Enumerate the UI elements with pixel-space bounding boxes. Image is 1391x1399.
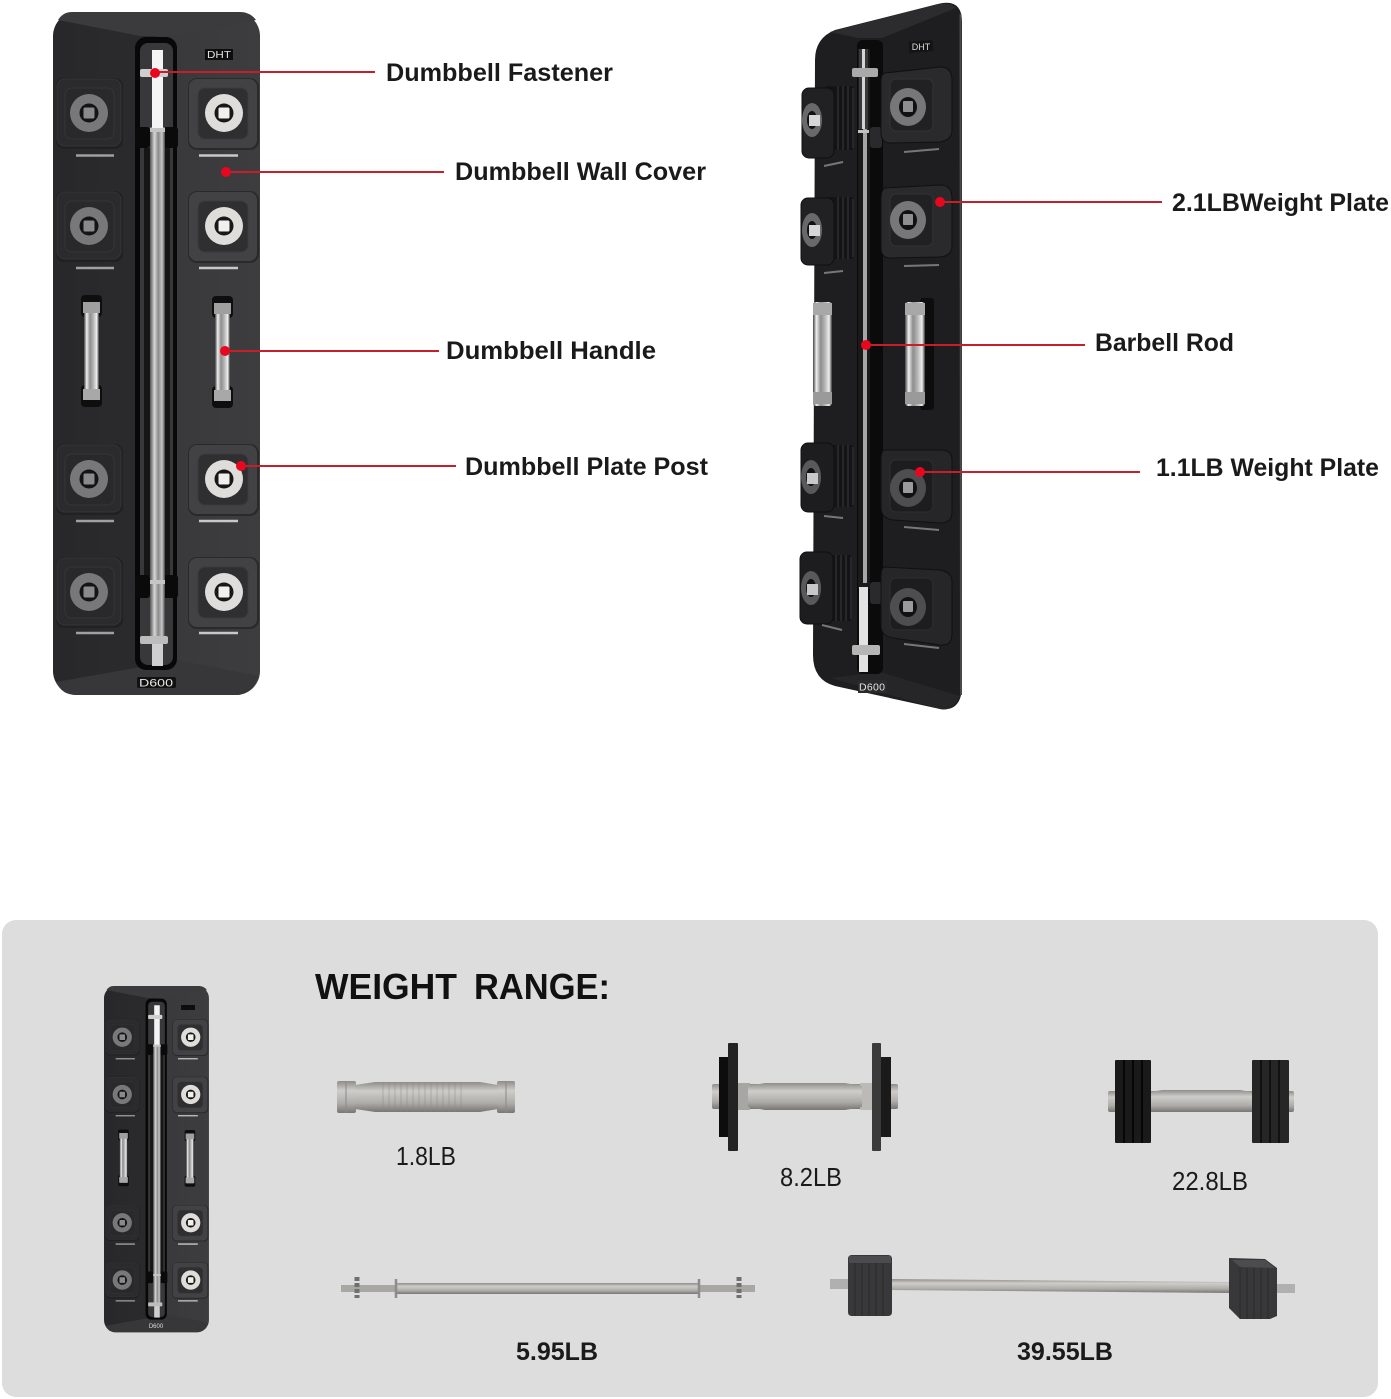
callout: Dumbbell Plate Post: Dumbbell Plate Post bbox=[465, 453, 709, 481]
panel: angled view wall rack bbox=[800, 3, 962, 709]
item: barbell 39.55LB bbox=[830, 1255, 1295, 1366]
item: handle 1.8LB bbox=[337, 1081, 515, 1171]
model label: D600 front: D600 bbox=[139, 678, 173, 690]
model label: D600 front bbox=[137, 677, 176, 690]
logo: DHT front bbox=[205, 49, 233, 61]
callout: Dumbbell Fastener: Dumbbell Fastener bbox=[386, 59, 613, 87]
right column plates bbox=[881, 67, 952, 645]
handles on angled rack bbox=[813, 298, 934, 410]
callout: Dumbbell Handle bbox=[220, 337, 656, 365]
panel: weight range bbox=[2, 920, 1378, 1397]
callout: Dumbbell Handle: Dumbbell Handle bbox=[446, 337, 656, 365]
item: dumbbell 22.8LB bbox=[1108, 1060, 1294, 1196]
callout: Dumbbell Plate Post bbox=[236, 453, 709, 481]
heading: weight range: WEIGHT bbox=[315, 966, 457, 1007]
item: barbell rod 5.95LB: 5.95LB bbox=[516, 1338, 598, 1366]
item: barbell 39.55LB: 39.55LB bbox=[1017, 1338, 1113, 1366]
callout: Barbell Rod bbox=[861, 329, 1234, 357]
callout: 2.1LB Weight Plate bbox=[935, 189, 1389, 217]
panel: front view wall rack bbox=[53, 12, 260, 695]
logo: DHT front: DHT bbox=[207, 50, 231, 61]
callout: 1.1LB Weight Plate bbox=[915, 454, 1379, 482]
mini rack image: D600 bbox=[149, 1324, 164, 1330]
heading: weight range bbox=[315, 966, 610, 1007]
logo: DHT angled bbox=[909, 40, 933, 53]
mini rack image bbox=[104, 986, 209, 1332]
callout: 2.1LB Weight Plate: 2.1LBWeight Plate bbox=[1172, 189, 1389, 217]
model label: D600 angled: D600 bbox=[859, 682, 885, 694]
item: dumbbell 22.8LB: 22.8LB bbox=[1172, 1166, 1248, 1196]
callout: Dumbbell Fastener bbox=[150, 59, 613, 87]
logo: DHT angled: DHT bbox=[912, 42, 931, 52]
callout: 1.1LB Weight Plate: 1.1LB Weight Plate bbox=[1156, 454, 1379, 482]
item: dumbbell 8.2LB: 8.2LB bbox=[780, 1162, 842, 1192]
item: barbell rod 5.95LB bbox=[341, 1277, 755, 1366]
item: handle 1.8LB: 1.8LB bbox=[396, 1141, 456, 1171]
left column plate stacks bbox=[800, 86, 854, 624]
heading: weight range: RANGE: bbox=[474, 966, 610, 1007]
item: dumbbell 8.2LB bbox=[712, 1043, 898, 1192]
callout: Dumbbell Wall Cover bbox=[221, 158, 706, 186]
callout: Barbell Rod: Barbell Rod bbox=[1095, 329, 1234, 357]
callout: Dumbbell Wall Cover: Dumbbell Wall Cover bbox=[455, 158, 706, 186]
